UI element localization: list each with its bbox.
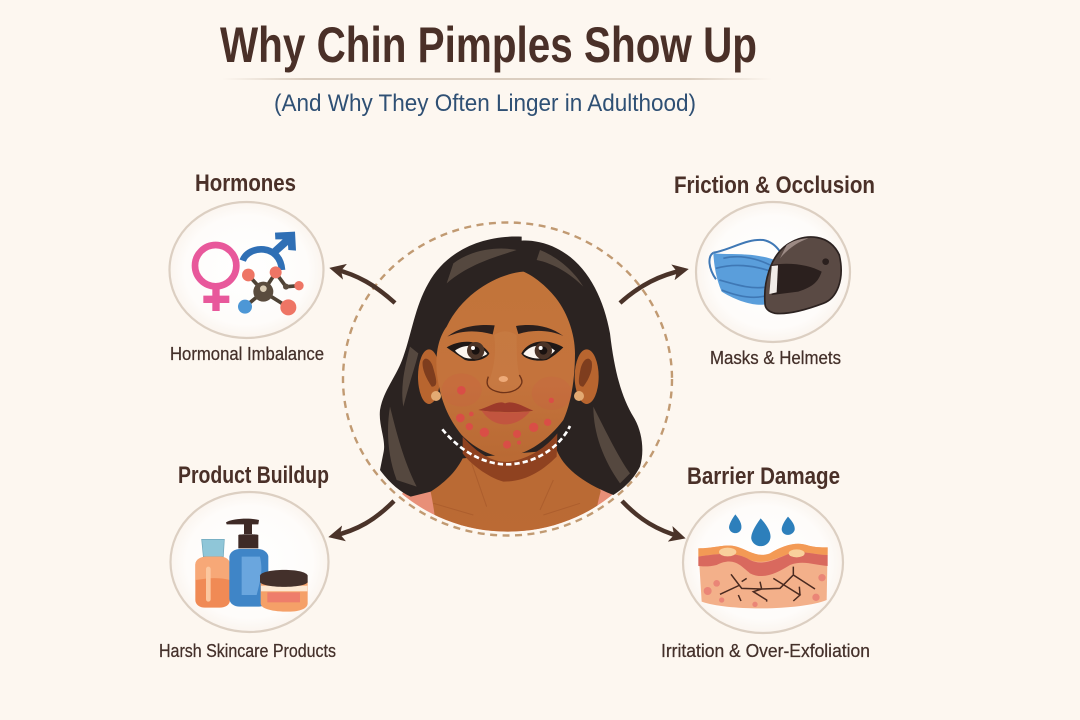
subtitle: (And Why They Often Linger in Adulthood) <box>274 90 696 117</box>
dashed circle <box>343 222 672 536</box>
dashed chin line <box>442 426 570 464</box>
woman's face illustration <box>373 237 642 540</box>
panel: product buildup <box>159 462 336 661</box>
arrow: to hormones <box>334 269 395 303</box>
label: hormonal imbalance: Hormonal Imbalance <box>170 344 324 364</box>
arrow: to barrier damage <box>622 501 681 537</box>
pimples on chin and cheeks <box>456 386 554 449</box>
icon circle: hormones <box>170 202 324 338</box>
heading: hormones: Hormones <box>195 170 296 197</box>
infographic <box>160 26 874 658</box>
panel: barrier damage <box>661 463 870 661</box>
icon circle: skincare products <box>170 492 328 632</box>
label: harsh skincare products: Harsh Skincare Products <box>159 641 336 661</box>
label: masks and helmets: Masks & Helmets <box>710 348 841 368</box>
central portrait <box>343 222 672 540</box>
label: irritation and over-exfoliation: Irritation & Over-Exfoliation <box>661 641 870 661</box>
arrow: to friction and occlusion <box>620 270 684 303</box>
heading: friction and occlusion: Friction & Occlusion <box>674 172 875 199</box>
heading: product buildup: Product Buildup <box>178 462 329 489</box>
panel: friction and occlusion <box>674 172 875 368</box>
icon circle: mask and helmet <box>696 202 850 342</box>
panel: hormones <box>170 170 324 364</box>
title: Why Chin Pimples Show Up <box>220 17 757 73</box>
arrow: to product buildup <box>333 501 394 536</box>
icon circle: damaged skin <box>683 492 843 633</box>
heading: barrier damage: Barrier Damage <box>687 463 840 490</box>
